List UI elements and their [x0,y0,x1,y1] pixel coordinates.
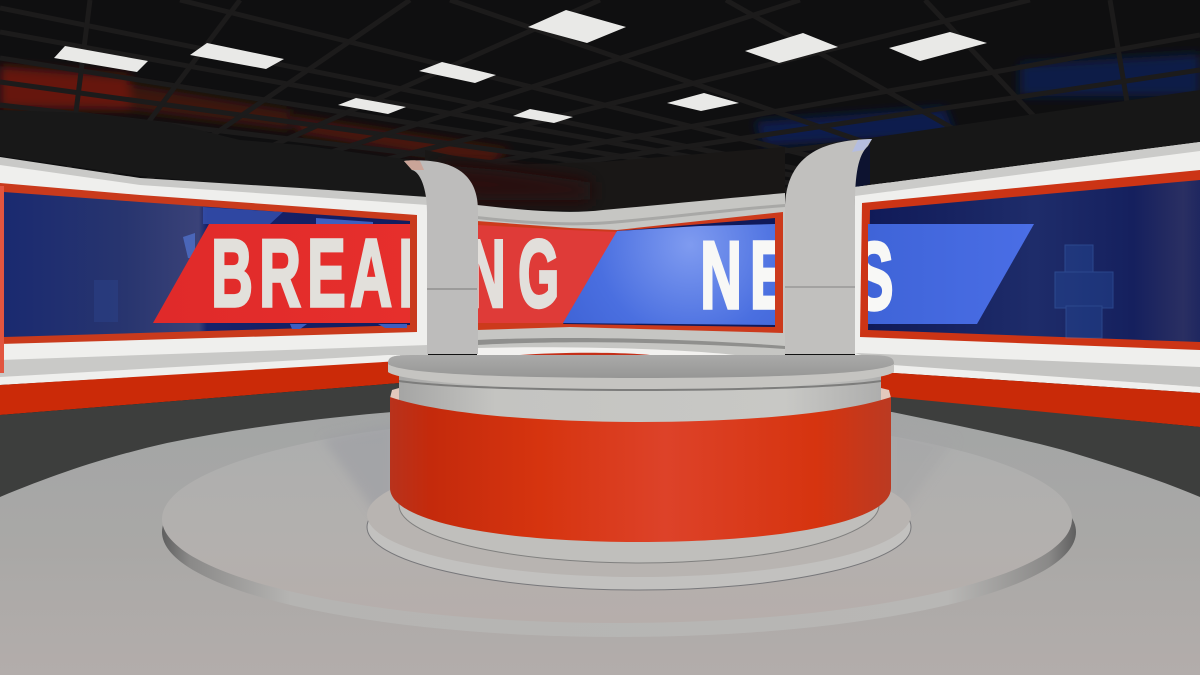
news desk [388,355,894,542]
desk upper band [399,372,881,426]
headline: news, second part: S [855,222,893,330]
right wall [855,142,1200,427]
red baseboard right [880,365,1200,393]
left screen frame [0,183,417,344]
left screen [4,192,410,337]
left wall [0,157,428,415]
breaking banner [153,219,617,327]
center screen frame [477,212,783,333]
back wall [477,193,785,356]
left pillar [404,160,478,354]
dark wall bands [0,90,1200,212]
globe graphic [94,207,407,329]
right pillar [785,139,872,354]
studio floor [0,412,1200,675]
news banner [563,221,1034,329]
right screen frame [860,170,1200,350]
ceiling [0,0,1200,240]
desk top [388,355,894,389]
right screen [868,180,1200,342]
wireframe figure [1055,245,1113,338]
ceiling lights [54,10,987,123]
headline: news: NE [700,221,788,329]
dark lower wall [0,383,1200,500]
desk base steps [367,447,911,590]
round platform [162,415,1076,637]
headline: breaking: BREAK [211,219,440,327]
red baseboard [0,355,400,385]
desk red front [390,397,891,542]
headline: breaking, second part: NG [468,221,559,328]
center screen [563,218,775,327]
